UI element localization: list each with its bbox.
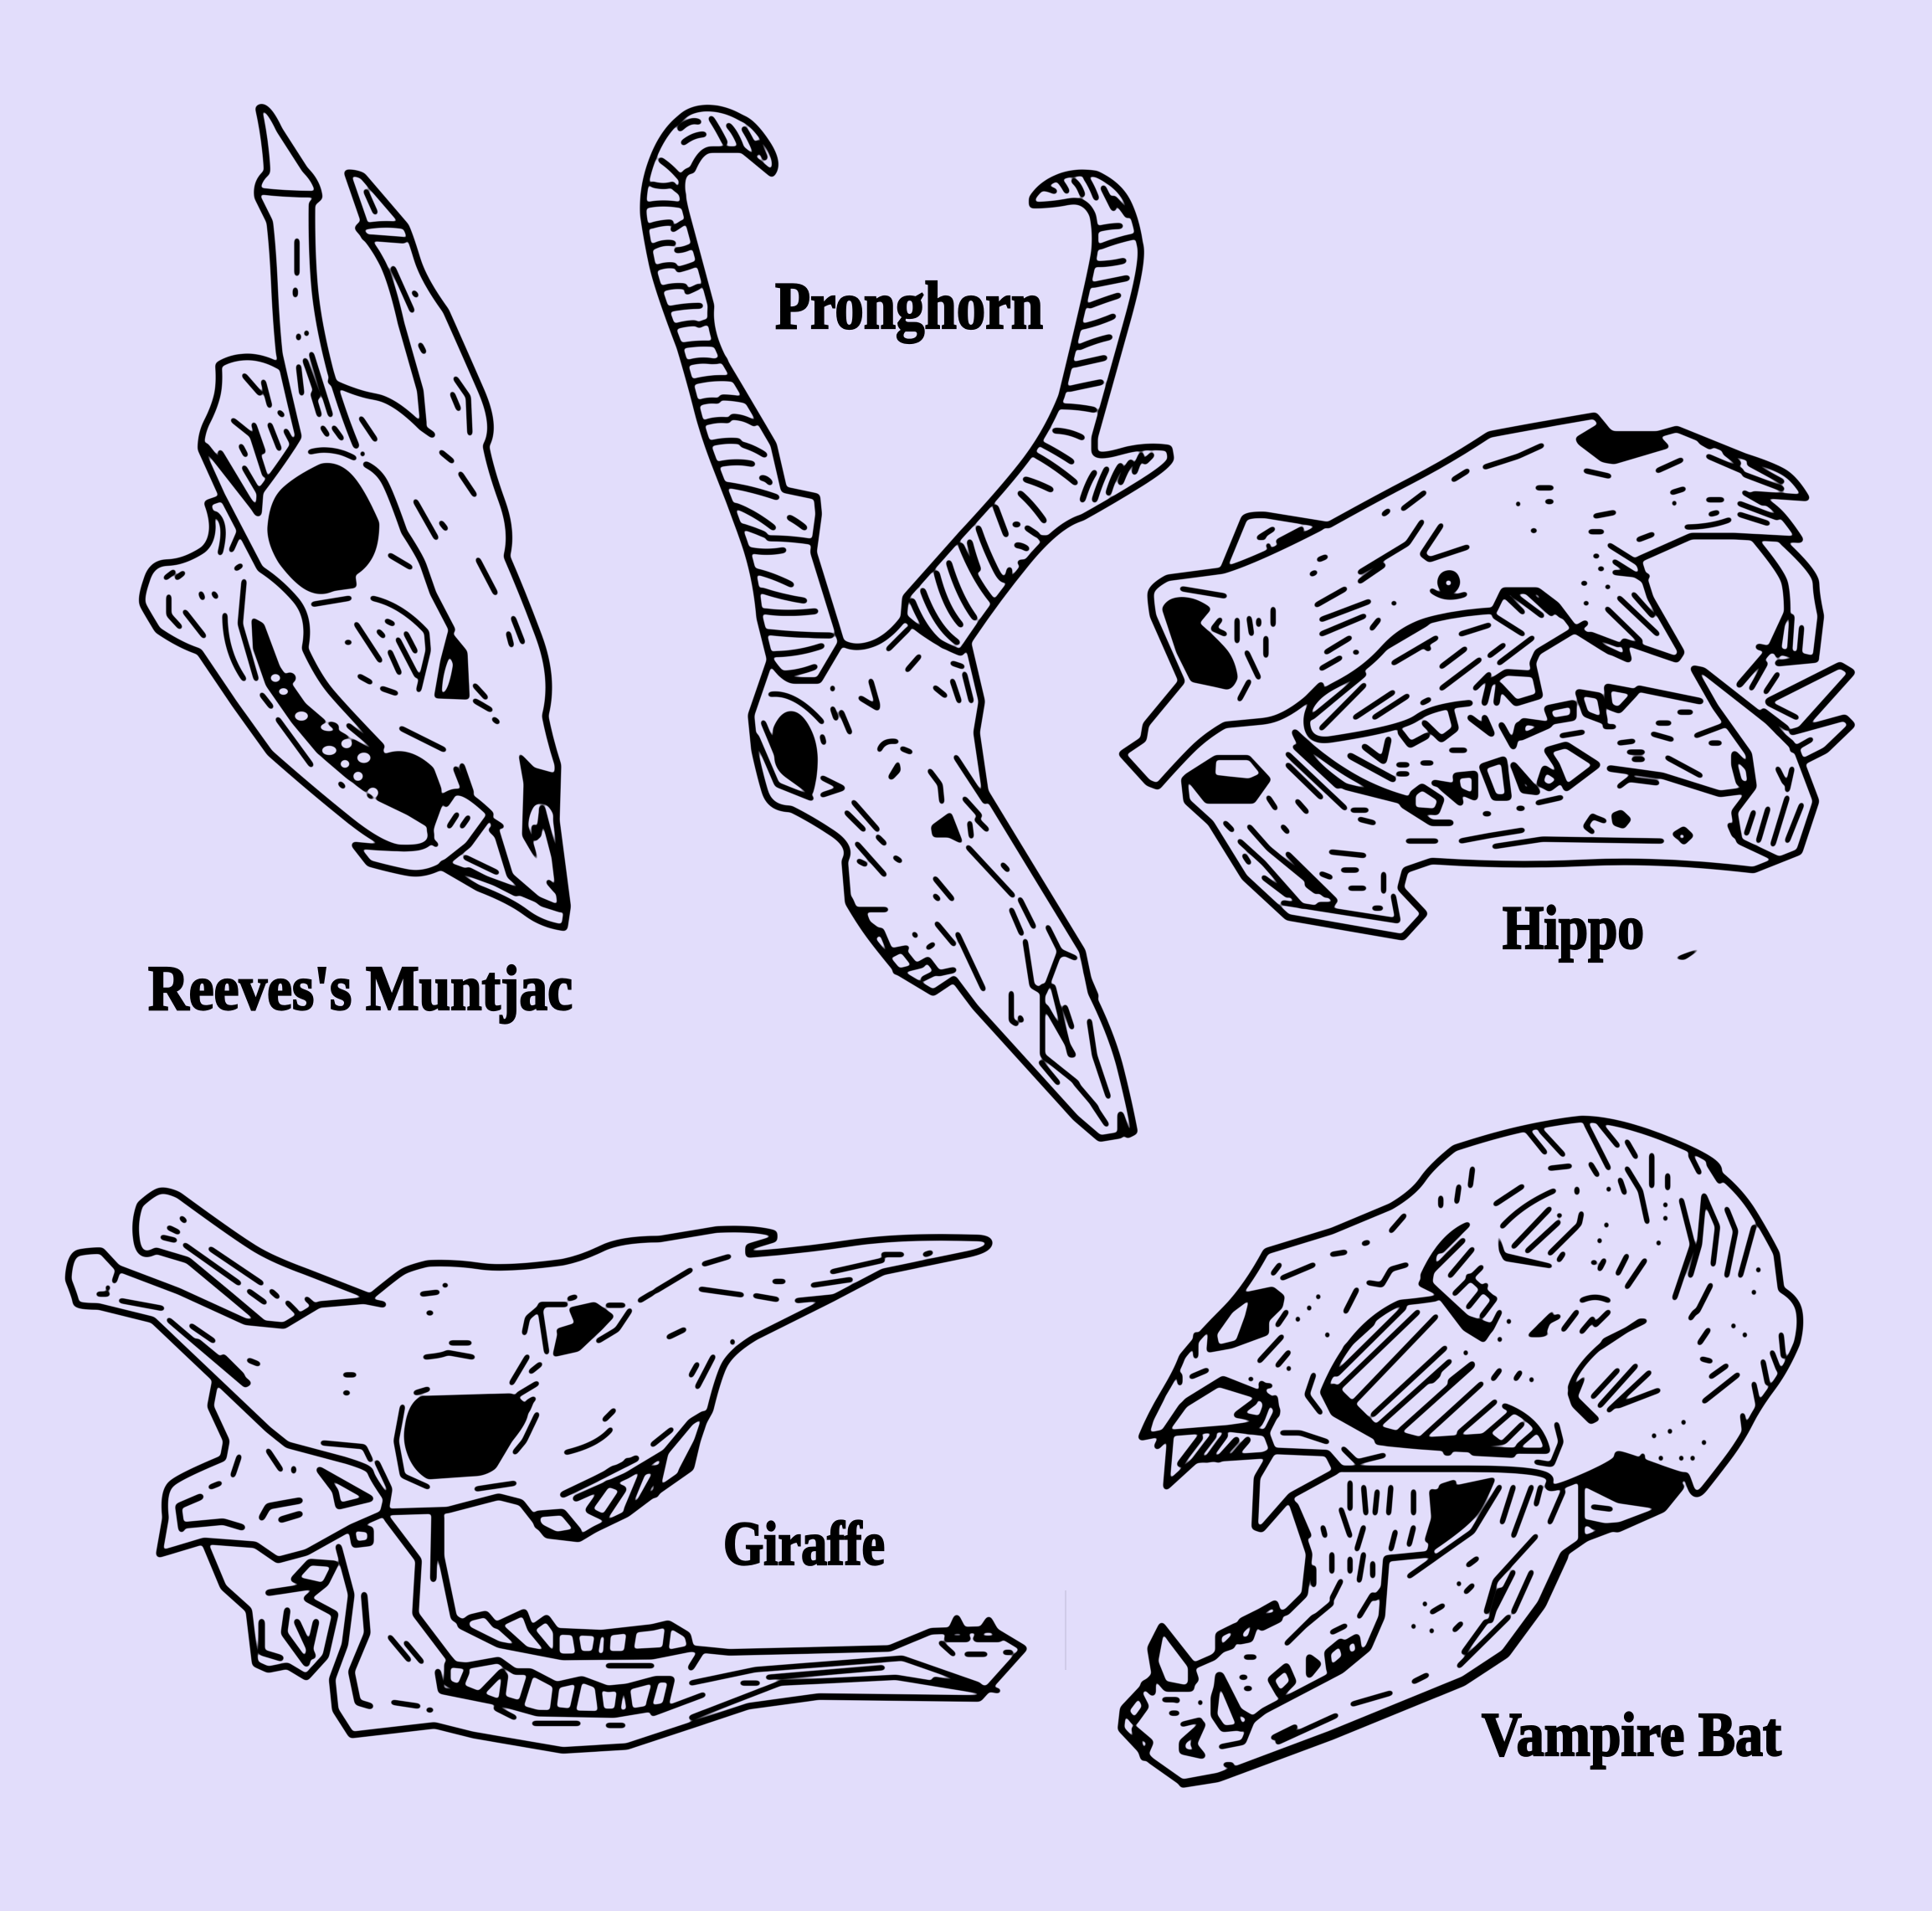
label: Hippo: Hippo xyxy=(1503,894,1644,963)
muntjac antorbital fossa xyxy=(434,630,469,699)
hippo detail hatching xyxy=(1182,442,1811,921)
bat large fossa rim xyxy=(1323,1298,1548,1451)
panel: Giraffe skull xyxy=(68,1190,1024,1750)
hippo lower teeth xyxy=(1412,745,1751,812)
panel: Vampire Bat skull xyxy=(1121,1119,1800,1785)
bat large fossa shadow xyxy=(1320,1231,1600,1449)
giraffe cranium outline xyxy=(68,1190,989,1560)
giraffe lower teeth lower row xyxy=(438,1652,701,1714)
label: Pronghorn: Pronghorn xyxy=(775,270,1043,343)
muntjac outline xyxy=(142,107,568,927)
panel: Reeves's Muntjac skull xyxy=(142,107,568,927)
stray mark near Hippo xyxy=(1674,948,1703,959)
bat upper tooth block xyxy=(1157,1384,1273,1487)
hippo nostril xyxy=(1163,598,1237,689)
label: Giraffe: Giraffe xyxy=(723,1510,885,1579)
bat beak upper xyxy=(1146,1384,1268,1435)
panel: Hippo skull xyxy=(1122,415,1852,938)
pronghorn nostril and cheek marks xyxy=(888,760,963,844)
muntjac detail hatching xyxy=(166,191,557,894)
bat rear black opening xyxy=(1581,1456,1686,1509)
bat fang xyxy=(1255,1451,1336,1529)
bat mouth cavity xyxy=(1427,1477,1495,1554)
left horn ridges xyxy=(647,118,831,674)
bat cranium outline xyxy=(1141,1119,1800,1494)
giraffe upper teeth xyxy=(537,1414,704,1535)
hippo upper teeth xyxy=(1364,672,1636,761)
bat lower fang xyxy=(1155,1626,1250,1729)
bat nasal opening xyxy=(1207,1287,1284,1352)
giraffe eye socket xyxy=(404,1394,527,1478)
hippo front teeth xyxy=(1768,665,1852,761)
hippo foramina xyxy=(1612,810,1693,845)
giraffe upper socket xyxy=(553,1302,614,1356)
pronghorn jaw teeth xyxy=(850,899,954,973)
bat lower jaw heavy edge xyxy=(1182,1556,1565,1785)
stray thin line near Giraffe xyxy=(1065,1590,1066,1670)
muntjac eye socket xyxy=(268,464,378,593)
hippo cranium outline xyxy=(1122,415,1806,787)
muntjac tooth row xyxy=(252,618,441,830)
bat detail marks xyxy=(1164,1123,1783,1765)
hippo top opening xyxy=(1576,424,1669,464)
giraffe lower teeth upper row xyxy=(460,1612,691,1657)
giraffe front teeth xyxy=(947,1618,999,1639)
hippo eye xyxy=(1438,571,1460,593)
giraffe mandible outline xyxy=(332,1514,1024,1750)
bat fossa hatching xyxy=(1336,1190,1658,1446)
giraffe jaw base xyxy=(204,1528,371,1677)
bat lower molars xyxy=(1125,1603,1359,1758)
giraffe detail marks xyxy=(98,1218,1011,1725)
muntjac nasal opening xyxy=(519,753,557,863)
hippo lower opening xyxy=(1184,756,1271,803)
pronghorn outline xyxy=(643,108,1171,1138)
pronghorn skull detail marks xyxy=(756,629,1108,1125)
giraffe ear region xyxy=(178,1470,371,1529)
hippo upper arched tooth xyxy=(1739,538,1821,685)
panel: Pronghorn skull xyxy=(643,108,1171,1138)
label: Reeves's Muntjac: Reeves's Muntjac xyxy=(148,953,573,1024)
hippo mandible outline xyxy=(1184,669,1816,938)
bat jaw outline xyxy=(1121,1482,1681,1783)
pronghorn eye socket xyxy=(773,711,817,795)
label: Vampire Bat: Vampire Bat xyxy=(1482,1701,1781,1770)
right horn ridges xyxy=(912,177,1152,646)
